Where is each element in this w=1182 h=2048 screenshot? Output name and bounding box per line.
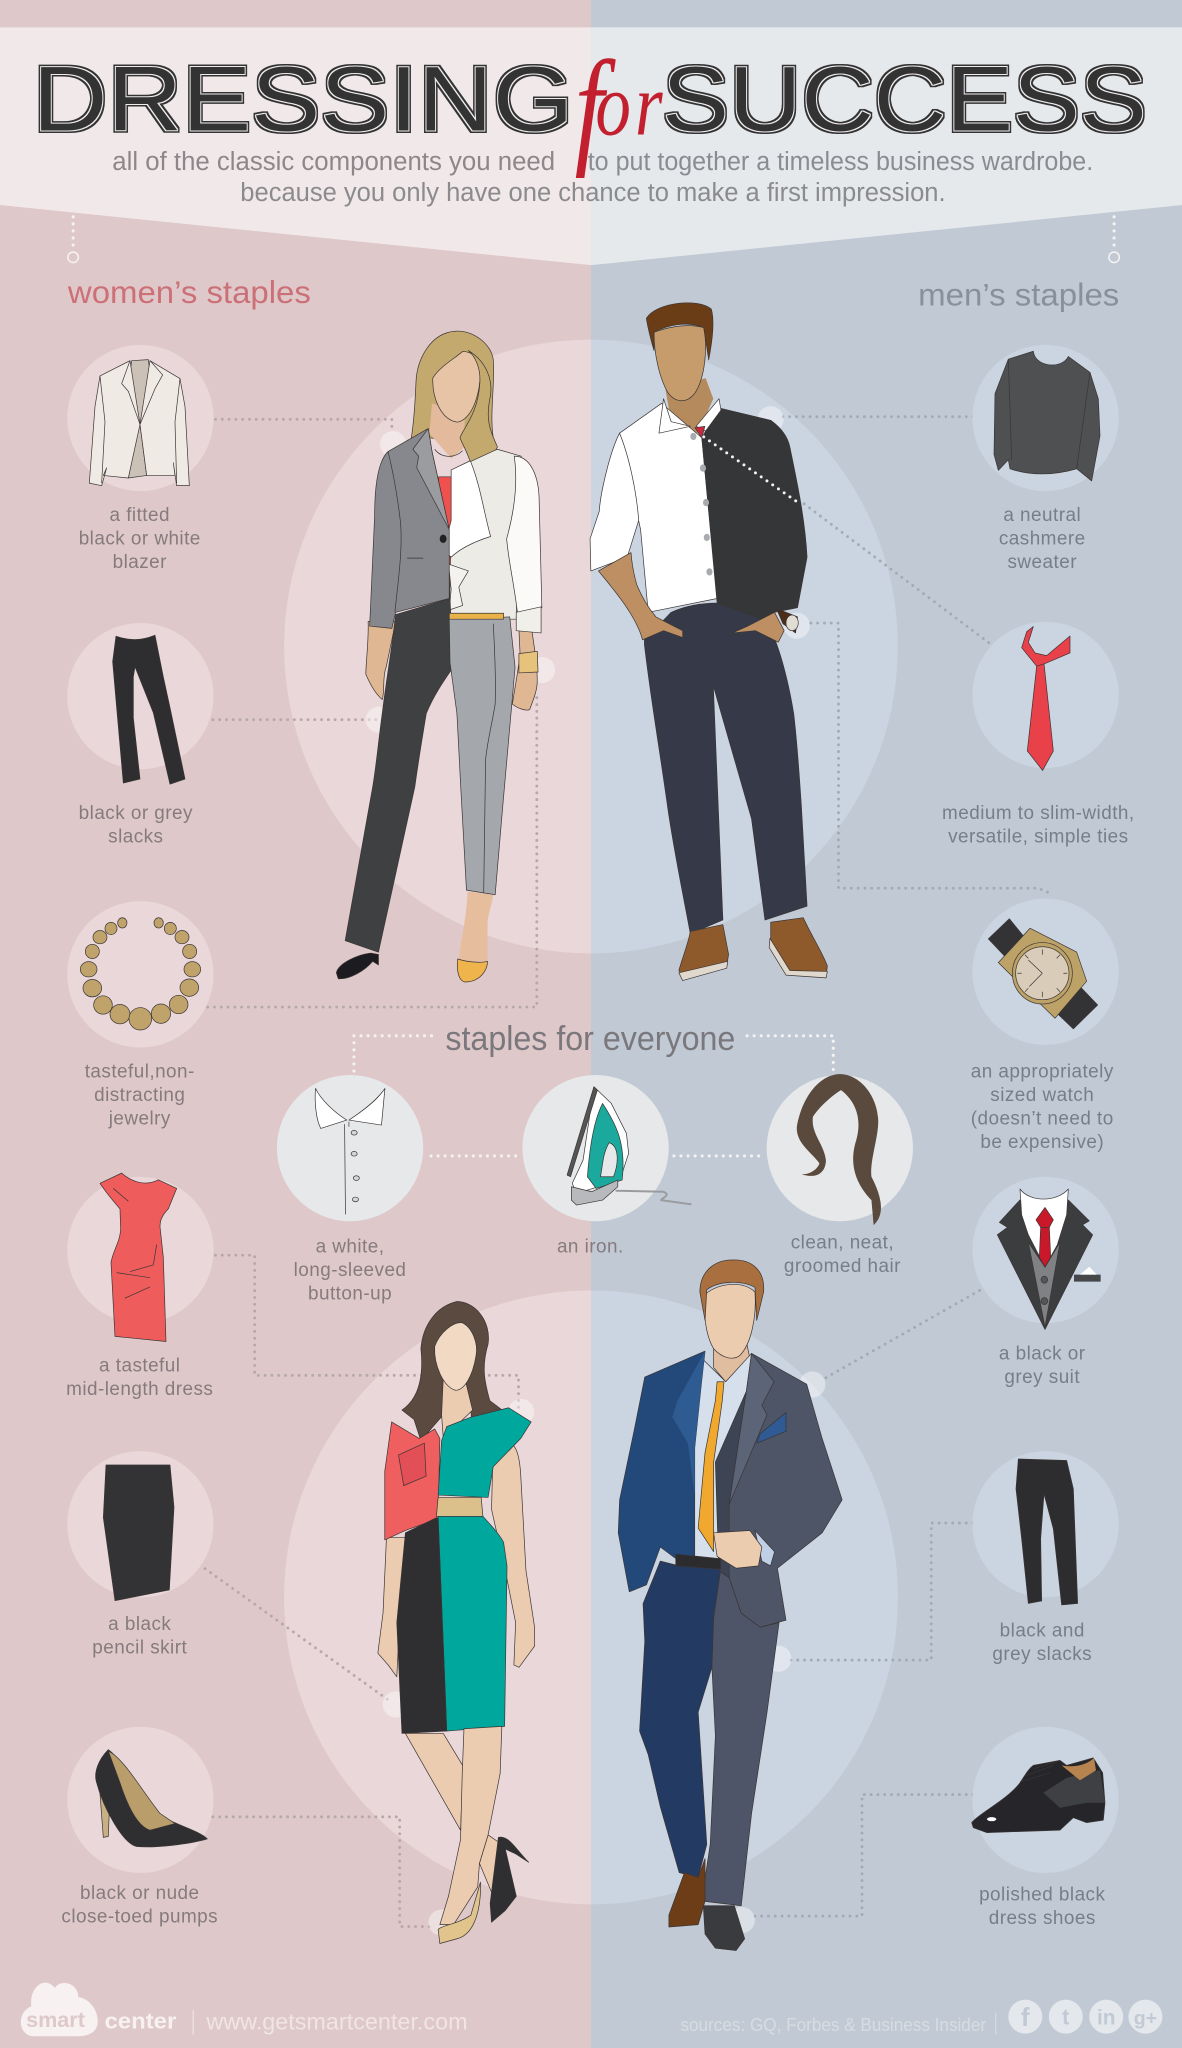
footer logo: cloud with smart center: center xyxy=(104,2008,177,2033)
label: watch: be expensive) xyxy=(980,1132,1104,1153)
label: watch: sized watch xyxy=(990,1085,1094,1106)
footer divider right xyxy=(995,2013,996,2035)
label: sweater: cashmere xyxy=(999,529,1086,550)
icon: necklace xyxy=(80,918,201,1030)
icon: hair xyxy=(797,1074,881,1225)
label: blazer: black or white xyxy=(79,529,201,550)
left header connector xyxy=(68,217,78,263)
item circle: pumps xyxy=(67,1727,214,1873)
heading: women's staples: women’s staples xyxy=(67,275,311,310)
figure: woman in colour-block dress xyxy=(378,1302,535,1943)
icon: sweater xyxy=(994,351,1100,481)
footer logo: cloud with smart center xyxy=(21,1983,177,2036)
label: dress shoes: polished black xyxy=(979,1884,1105,1905)
social icon: facebook xyxy=(1008,2000,1042,2034)
icon: dress shoe xyxy=(972,1758,1105,1833)
social icon: google plus xyxy=(1128,2000,1162,2034)
label: tie: medium to slim-width, xyxy=(942,803,1135,824)
connectors: men's items xyxy=(755,417,1047,1916)
social icon: facebook: f xyxy=(1021,2002,1030,2032)
icon: pump xyxy=(96,1750,207,1847)
label: skirt: a black xyxy=(108,1614,171,1635)
item circle: watch xyxy=(972,899,1119,1045)
label: skirt: pencil skirt xyxy=(92,1638,187,1659)
item circle: suit xyxy=(972,1177,1119,1323)
item circle: button-up xyxy=(277,1075,423,1221)
label: dress shoes: dress shoes xyxy=(989,1908,1096,1929)
label: button-up: a white, xyxy=(316,1237,384,1258)
label: men's slacks: grey slacks xyxy=(992,1644,1092,1665)
social icon: google plus: g+ xyxy=(1134,2007,1157,2029)
footer logo: cloud with smart center: smart xyxy=(26,2009,85,2032)
footer url: www.getsmartcenter.com xyxy=(205,2009,468,2035)
figure: woman in blazer and slacks xyxy=(336,331,542,982)
subtitle line 1 left: all of the classic components you need xyxy=(112,148,555,176)
footer divider xyxy=(193,2010,194,2035)
label: jewelry: distracting xyxy=(94,1085,185,1106)
heading: men's staples: men’s staples xyxy=(918,278,1119,313)
icon: white shirt collar xyxy=(315,1088,385,1214)
item circle: tie xyxy=(972,622,1119,768)
icon: pencil skirt xyxy=(103,1465,174,1601)
item circle: jewelry xyxy=(67,901,214,1048)
label: button-up: button-up xyxy=(308,1284,392,1305)
label: tie: versatile, simple ties xyxy=(948,826,1129,847)
label: dress: mid-length dress xyxy=(66,1379,213,1400)
connector end blobs xyxy=(366,406,825,1936)
background: men's side xyxy=(591,0,1182,2048)
item circle: sweater xyxy=(972,345,1119,491)
spotlight circle: top figures xyxy=(284,340,898,953)
header band: left xyxy=(0,27,591,265)
label: suit: a black or xyxy=(999,1344,1086,1365)
social icon: twitter xyxy=(1049,2000,1083,2034)
heading: staples for everyone: staples for everyone xyxy=(445,1020,735,1058)
connectors: staples for everyone xyxy=(354,1036,833,1156)
label: slacks: slacks xyxy=(108,826,163,847)
icon: men's slacks xyxy=(1016,1459,1078,1605)
label: men's slacks: black and xyxy=(1000,1621,1085,1642)
subtitle line 1 right: to put together a timeless business wardrobe. xyxy=(588,148,1093,176)
item circle: slacks xyxy=(67,623,214,769)
spotlight circle: bottom figures xyxy=(284,1290,898,1904)
label: jewelry: jewelry xyxy=(108,1109,171,1130)
header band: right xyxy=(591,27,1182,265)
icon: tie xyxy=(1022,627,1070,770)
icon: suit xyxy=(997,1189,1101,1329)
label: button-up: long-sleeved xyxy=(294,1260,406,1281)
label: hair: groomed hair xyxy=(784,1256,901,1277)
icon: blazer xyxy=(89,360,189,486)
social icon: linkedin xyxy=(1089,2000,1123,2034)
footer sources: sources: GQ, Forbes & Business Insider xyxy=(680,2014,986,2035)
item circle: dress xyxy=(67,1177,214,1323)
social icon: linkedin: in xyxy=(1097,2006,1116,2029)
title: script for: f xyxy=(575,34,616,179)
label: slacks: black or grey xyxy=(79,803,193,824)
item circle: skirt xyxy=(67,1451,214,1597)
title: DRESSING: DRESSING xyxy=(33,49,573,151)
label: dress: a tasteful xyxy=(99,1355,180,1376)
title: script for: or xyxy=(595,56,667,154)
item circle: men's slacks xyxy=(972,1451,1119,1597)
item circle: iron xyxy=(522,1075,669,1221)
label: suit: grey suit xyxy=(1004,1367,1080,1388)
label: blazer: blazer xyxy=(113,552,167,573)
label: hair: clean, neat, xyxy=(791,1233,894,1254)
label: blazer: a fitted xyxy=(110,505,170,526)
figure: man in shirt and sweater xyxy=(590,303,827,981)
icon: watch xyxy=(988,919,1098,1029)
icon: red dress xyxy=(100,1173,177,1341)
background: women's side xyxy=(0,0,591,2048)
icon: iron xyxy=(567,1087,691,1205)
label: pumps: black or nude xyxy=(80,1883,200,1904)
label: pumps: close-toed pumps xyxy=(61,1907,218,1928)
title: SUCCESS: SUCCESS xyxy=(662,49,1147,151)
figure: man in colour-block suit xyxy=(618,1260,842,1951)
label: watch: an appropriately xyxy=(971,1062,1114,1083)
right header connector xyxy=(1109,217,1119,263)
label: sweater: sweater xyxy=(1008,552,1077,573)
label: watch: (doesn’t need to xyxy=(971,1109,1114,1130)
label: iron: an iron. xyxy=(557,1237,624,1258)
label: sweater: a neutral xyxy=(1003,505,1081,526)
item circle: blazer xyxy=(67,345,214,491)
social icon: twitter: t xyxy=(1062,2004,1070,2029)
label: jewelry: tasteful,non- xyxy=(85,1062,195,1083)
item circle: dress shoes xyxy=(972,1727,1119,1873)
connectors: women's items xyxy=(205,419,537,1927)
subtitle line 2: because you only have one chance to make a first impression. xyxy=(240,179,946,207)
item circle: hair xyxy=(767,1075,913,1221)
icon: slacks xyxy=(113,635,185,784)
